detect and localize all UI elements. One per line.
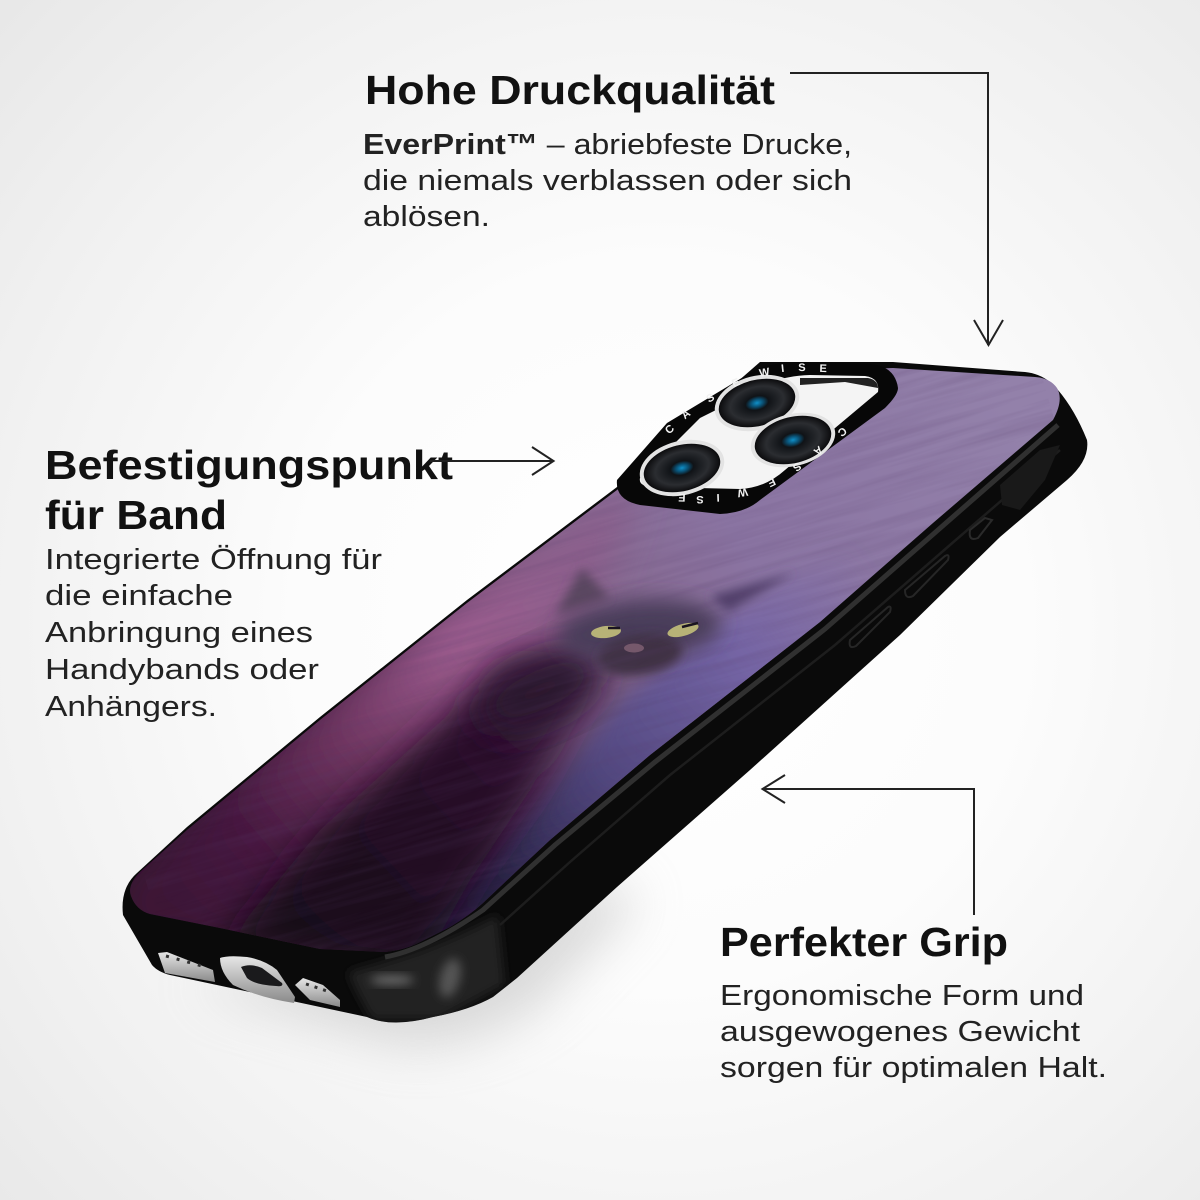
glossy bottom corner — [348, 915, 505, 1020]
phone shadow — [190, 880, 640, 1046]
body text: ablösen. — [363, 201, 490, 233]
heading — [45, 442, 453, 538]
brand ring upper: S — [704, 391, 717, 405]
callout: print quality — [363, 67, 852, 233]
body text: ausgewogenes Gewicht — [720, 1016, 1080, 1048]
brand ring upper: E — [819, 363, 827, 375]
speaker left — [158, 952, 215, 982]
usb port — [220, 956, 295, 1003]
body text: Anhängers. — [45, 691, 217, 723]
heading: Hohe Druckqualität — [365, 67, 775, 113]
speaker right — [295, 978, 340, 1007]
body text: die niemals verblassen oder sich — [363, 165, 852, 197]
brand ring lower: I — [716, 491, 720, 503]
brand ring lower — [678, 424, 849, 505]
body text: Anbringung eines — [45, 617, 313, 649]
usb opening — [241, 965, 282, 986]
side switch — [970, 518, 992, 539]
speaker left holes — [166, 956, 202, 966]
body text: die einfache — [45, 580, 233, 612]
brand ring upper — [663, 362, 827, 437]
body text — [363, 129, 852, 233]
cat face — [556, 593, 724, 667]
brand ring lower: C — [835, 424, 849, 438]
heading: für Band — [45, 492, 227, 538]
brand ring lower: S — [696, 493, 704, 505]
brand ring upper: E — [730, 376, 742, 390]
glass top shadow — [800, 378, 878, 388]
volume button — [850, 555, 949, 647]
lens top — [709, 366, 805, 440]
painted back — [130, 368, 1060, 952]
cat right ear — [710, 572, 795, 612]
brand ring upper: C — [663, 423, 677, 437]
body text: Ergonomische Form und — [720, 980, 1084, 1012]
callout: strap attachment — [45, 442, 453, 723]
callout: grip — [720, 919, 1107, 1084]
cat muzzle — [596, 629, 684, 681]
phone case — [122, 362, 1088, 1022]
brand ring lower: E — [678, 491, 686, 503]
camera glass — [640, 375, 878, 489]
camera island — [617, 362, 898, 514]
brand ring lower: S — [790, 459, 803, 473]
brand ring lower: E — [765, 475, 777, 489]
body text: sorgen für optimalen Halt. — [720, 1052, 1107, 1084]
dark wedge — [220, 660, 590, 970]
brand ring upper: A — [679, 407, 693, 422]
cat left eye — [591, 626, 621, 638]
brand ring upper: S — [798, 362, 806, 374]
heading: Befestigungspunkt — [45, 442, 453, 488]
body text — [45, 544, 382, 723]
lens left — [634, 431, 730, 505]
body text: Handybands oder — [45, 654, 319, 686]
violet band along right edge — [434, 591, 845, 934]
cat right eye — [668, 622, 698, 638]
brand ring upper: W — [758, 366, 771, 380]
cat nose — [624, 644, 644, 652]
heading: Perfekter Grip — [720, 919, 1008, 965]
island frame — [617, 362, 898, 514]
cat pupils — [608, 623, 698, 628]
brush streaks — [232, 370, 1054, 948]
brand ring lower: A — [811, 443, 825, 458]
body text: Integrierte Öffnung für — [45, 544, 382, 576]
pink band along left edge — [130, 490, 617, 942]
case body — [123, 362, 1087, 1022]
arrow: strap attachment — [430, 447, 554, 475]
arrow: grip — [762, 775, 974, 915]
side inner line — [500, 450, 1060, 925]
arrow: print quality — [790, 73, 1003, 345]
cat left ear — [555, 568, 610, 615]
side band ridge — [385, 425, 1058, 957]
body text: EverPrint™ – abriebfeste Drucke, — [363, 129, 852, 161]
brand ring upper: I — [781, 363, 785, 375]
speaker right holes — [306, 984, 330, 992]
base gradient — [120, 360, 1070, 960]
cat body — [465, 632, 615, 748]
lens right — [745, 404, 841, 476]
brand ring lower: W — [736, 485, 749, 499]
body text — [720, 980, 1107, 1084]
power button — [1000, 445, 1060, 510]
